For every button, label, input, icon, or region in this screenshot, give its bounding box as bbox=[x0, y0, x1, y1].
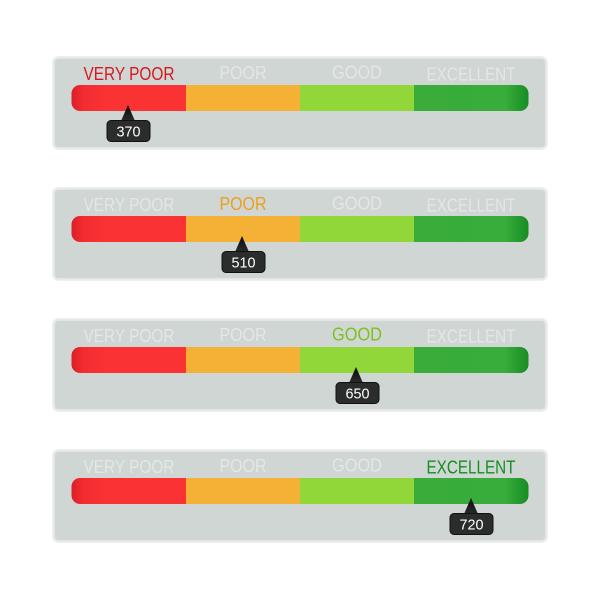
panel background bbox=[54, 58, 546, 148]
marker: 370: 370 bbox=[116, 124, 140, 140]
label: very poor: VERY POOR bbox=[84, 195, 174, 215]
label: excellent: EXCELLENT bbox=[426, 326, 516, 346]
label: very poor: VERY POOR bbox=[84, 326, 174, 346]
panel background bbox=[54, 450, 546, 542]
heading: poor (active): POOR bbox=[220, 194, 266, 214]
heading: very poor (active): VERY POOR bbox=[84, 64, 174, 84]
marker: 720 bbox=[450, 498, 493, 534]
marker: 510 bbox=[222, 236, 265, 272]
marker: 650: 650 bbox=[346, 386, 370, 402]
score bar bbox=[72, 347, 528, 373]
panel background bbox=[54, 320, 546, 410]
label: very poor: VERY POOR bbox=[84, 457, 174, 477]
label: poor: POOR bbox=[220, 456, 266, 476]
score bar bbox=[72, 478, 528, 504]
label: poor: POOR bbox=[220, 325, 266, 345]
label: excellent: EXCELLENT bbox=[426, 196, 516, 216]
label: good: GOOD bbox=[332, 62, 382, 82]
score bar bbox=[72, 85, 528, 111]
panel: excellent rating bbox=[54, 450, 546, 542]
score bar bbox=[72, 216, 528, 242]
panel: poor rating bbox=[54, 188, 546, 280]
heading: excellent (active): EXCELLENT bbox=[426, 458, 516, 478]
heading: good (active): GOOD bbox=[332, 324, 382, 344]
marker: 720: 720 bbox=[460, 516, 484, 534]
marker: 370 bbox=[107, 105, 150, 142]
label: good: GOOD bbox=[332, 456, 382, 476]
panel background bbox=[54, 188, 546, 280]
label: good: GOOD bbox=[332, 194, 382, 214]
panel: very poor rating bbox=[54, 58, 546, 148]
panel: good rating bbox=[54, 320, 546, 410]
marker: 650 bbox=[336, 367, 379, 404]
label: poor: POOR bbox=[220, 63, 266, 83]
label: excellent: EXCELLENT bbox=[426, 64, 516, 84]
marker: 510: 510 bbox=[232, 254, 256, 272]
